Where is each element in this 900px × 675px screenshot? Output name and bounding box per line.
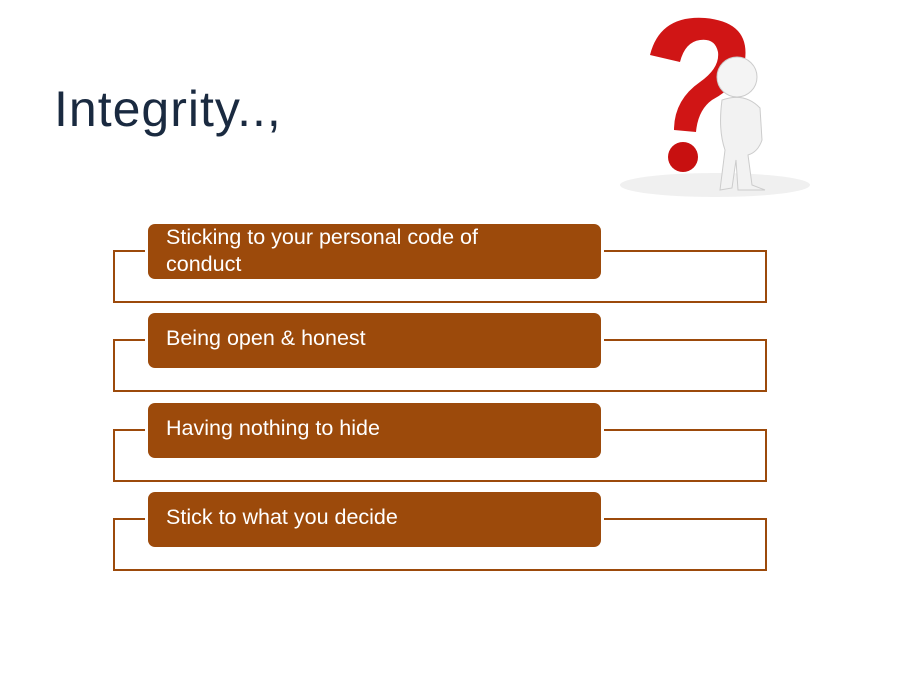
item 1: Sticking to your personal code of [166,224,478,248]
item 2: Being open & honest [166,326,366,350]
item 4: Stick to what you decide [166,505,398,529]
item 1: conduct [166,252,241,276]
item 3 [113,403,767,482]
item 1 [113,224,767,303]
item 4 [113,492,767,571]
item 2 [113,313,767,392]
item 3: Having nothing to hide [166,416,380,440]
title: Integrity.., [54,81,282,137]
icon: question mark with thinking figure [620,18,810,197]
